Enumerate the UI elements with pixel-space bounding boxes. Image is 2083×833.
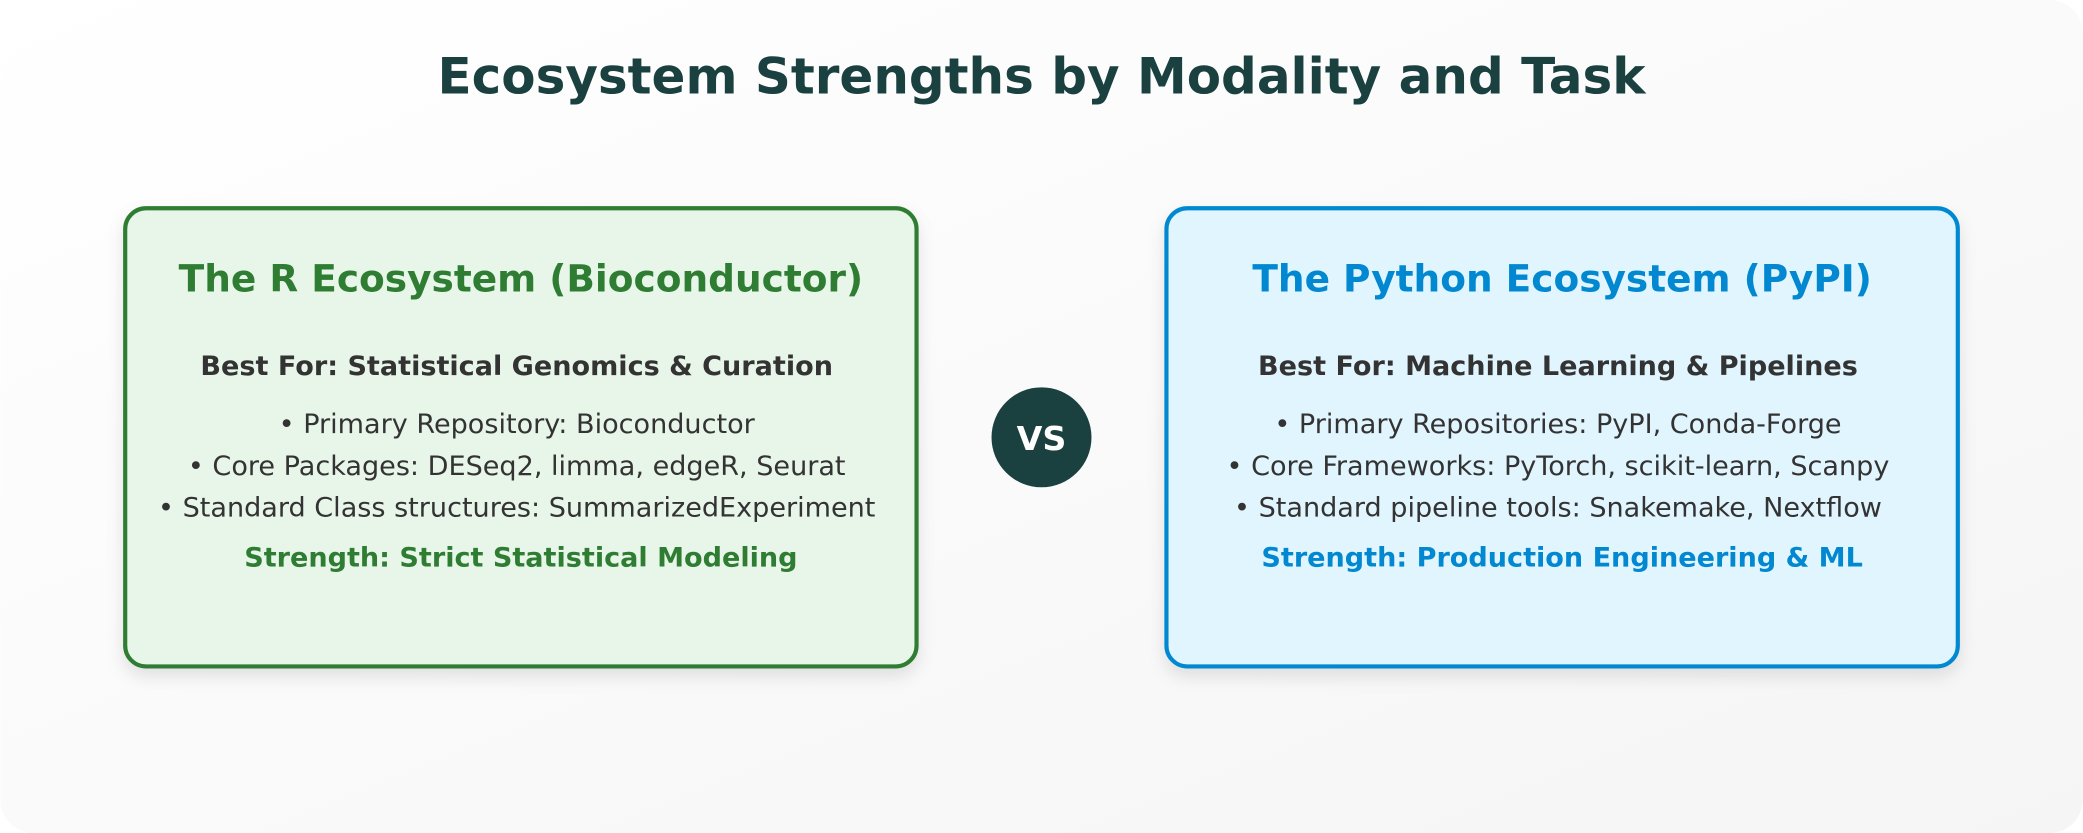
subheading: R best for: Best For: Statistical Genomics & Curation [200,351,833,382]
title: Ecosystem Strengths by Modality and Task [438,48,1647,106]
heading: R ecosystem: The R Ecosystem (Bioconductor) [179,257,863,301]
list: Python bullets: • Core Frameworks: PyTorch, scikit-learn, Scanpy [1227,451,1889,482]
heading: Python ecosystem: The Python Ecosystem (PyPI) [1252,257,1872,301]
list: R bullets [158,409,875,523]
badge: VS: VS [1017,419,1066,458]
panel: R ecosystem [125,208,917,666]
panel: Python ecosystem [1166,208,1958,666]
list: Python bullets: • Primary Repositories: PyPI, Conda-Forge [1274,409,1842,440]
card: Python background [1166,208,1958,666]
list: Python bullets: • Standard pipeline tools: Snakemake, Nextflow [1234,492,1882,523]
list: R bullets: • Primary Repository: Bioconductor [279,409,756,440]
strength: Python: Strength: Production Engineering & ML [1261,542,1863,573]
list: Python bullets [1227,409,1889,523]
card: R background [125,208,917,666]
list: R bullets: • Core Packages: DESeq2, limma, edgeR, Seurat [188,451,846,482]
list: R bullets: • Standard Class structures: SummarizedExperiment [158,492,875,523]
badge: VS [992,387,1091,487]
strength: R: Strength: Strict Statistical Modeling [244,542,798,573]
subheading: Python best for: Best For: Machine Learning & Pipelines [1258,351,1858,382]
